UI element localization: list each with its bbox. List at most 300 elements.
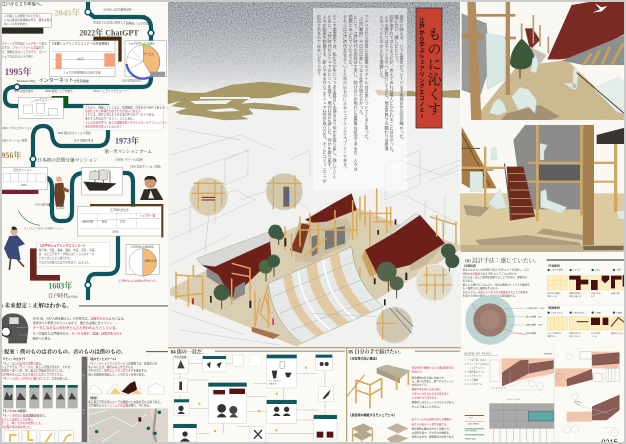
plan 1 <box>490 352 554 402</box>
maroon bar <box>2 190 38 194</box>
panel: perspective 2 <box>460 120 626 252</box>
intro text columns <box>317 14 404 184</box>
ground <box>170 205 460 347</box>
big post <box>583 125 594 252</box>
intro text columns: 四年後すれてきたようだが、考えてみれば隣人とかかわることはなかった。 <box>390 15 394 154</box>
text: site: 江戸時代からモノとシェアの記憶が残り、今に至る。 <box>88 404 152 408</box>
pale figures and plants <box>470 143 626 220</box>
box: Edo graph: 100年 <box>112 229 119 233</box>
text: project outline: 「モノ」がシェアできるサービスの建物では、家族のもの <box>88 361 158 365</box>
future text: 世界すべて学習されていくなかで、僕たちは信じきっていく…… <box>33 320 118 325</box>
text: Edo sharing economy: それらがどんどん駆られた。 <box>39 256 73 260</box>
vertical gray band: コト <box>81 408 85 414</box>
panel: timeline history <box>5 0 154 300</box>
panel: 1956 to 1603 section <box>0 148 163 299</box>
text block 1995: 高度化された情報化が起きた方が良いと考える。 <box>85 109 143 113</box>
plan legend list: 6. シェアスペース <box>465 381 482 385</box>
pie chart box <box>125 41 167 79</box>
plan legend list: 5. シェア菜園 <box>465 377 478 381</box>
plan legends: LAND SHARE <box>467 423 480 426</box>
text red 05b: 既存建物に重ね合わせて設置する。 <box>412 426 451 430</box>
sky <box>460 120 624 194</box>
station labels 1973 <box>2 126 94 143</box>
box: Edo pie chart <box>118 244 159 282</box>
floor edge <box>577 73 626 115</box>
text: project outline: を人々に広げ、場のみならず公共にも、 <box>88 365 136 369</box>
title plate <box>416 8 442 128</box>
far structure <box>522 15 548 67</box>
label notes <box>115 158 161 168</box>
node: central big <box>208 383 247 423</box>
left roof structure <box>462 127 497 188</box>
box: Edo graph: 長屋 <box>102 219 107 223</box>
ground shadows <box>463 205 583 248</box>
right building <box>362 213 445 277</box>
text red 05a: 利用する。 <box>412 370 424 374</box>
node: left small <box>174 378 189 415</box>
diagram: shopping flow: シェアエコノミー <box>34 98 56 102</box>
method grid 1: ④囲う <box>616 268 622 272</box>
vertical gray band <box>81 357 87 443</box>
subhead furniture: 【可変性の高い構法】 <box>349 355 378 360</box>
box: Edo graph: 共同 <box>120 219 126 223</box>
text: site: 東京都江戸区の深川エリアは隅田川と水路の交わる場である。 <box>88 400 163 404</box>
plan legend list <box>465 358 489 385</box>
text: site <box>88 396 163 408</box>
callout leaders <box>205 203 377 317</box>
text red 05a: 柱部分家で建築するとき構造的体を用 <box>412 365 454 369</box>
stairs <box>504 163 535 221</box>
plan 2 gray: シェアリビング <box>507 397 521 401</box>
node: japan <box>318 387 333 402</box>
divider <box>545 305 626 442</box>
timeline labels top: 生活は AIに完全に移行している。 <box>93 20 134 24</box>
timeline stations <box>14 9 154 288</box>
text red 05b: の場所を保つ、それぞれの機能を。 <box>412 430 451 434</box>
pie chart box: サービス <box>143 52 154 56</box>
station labels 1973: 1985 都心のマンション増加 <box>57 131 91 135</box>
node: share 1: シェアのモノ <box>269 379 281 383</box>
text design: 更に人と関わることにより、住民の関係がシェアする範囲を <box>463 282 530 286</box>
intro text columns: 人々が知恵や創意する、新人であるからこそシェア社会が成り立ち。そこにコミュニティが <box>322 15 328 184</box>
node: share 1 <box>267 355 297 388</box>
text: project outline: 【案のモノとスケール】 <box>88 357 118 361</box>
right timber frame <box>360 215 457 283</box>
node: small 1 <box>233 355 261 366</box>
heading 02 proposal: 02 提案：僕のものは君のもの。君のものは僕のもの。 <box>0 347 126 355</box>
node: share 1: 交換する <box>269 382 277 386</box>
station note <box>18 202 64 230</box>
text: thing sharing: 全体の一部一つ分、住、着などが組み合わせている。 <box>1 369 65 373</box>
method grid 2: 【断面操作】 <box>547 305 562 309</box>
text red 05a: 主に手で運ぶことがある。 <box>412 404 441 408</box>
site map <box>88 408 168 443</box>
panel: bottom center <box>168 347 461 442</box>
intro text columns: 隣に会い、隣しだという。 <box>394 14 400 64</box>
roof <box>547 2 626 59</box>
method grid 2: 空間の高さを <box>569 331 581 335</box>
text design <box>463 264 530 298</box>
main title: ものに沁くす <box>426 27 442 117</box>
station labels 1995: 2015 民泊の導入 <box>122 79 142 83</box>
text block sharing: ますが、プラットフォーム企業の力 <box>2 46 44 50</box>
text: case study: したものを集めた。 <box>24 413 48 417</box>
intro text columns: となっていたのかと心を覚醒した。 <box>380 15 384 81</box>
year 1995: 1995年 <box>5 66 32 77</box>
legend dots <box>198 367 307 432</box>
chart box: sharing economy bars: 1兆円 <box>77 57 84 61</box>
icon: AI head <box>1 313 28 343</box>
tree <box>510 38 534 78</box>
detail circle 2 <box>266 173 303 210</box>
method grid 2: つくる <box>591 334 597 338</box>
method grid 2: 設置する <box>547 334 555 338</box>
chart box: sharing economy bars <box>49 40 115 77</box>
plan title: SHOW OF PLAN <box>464 351 491 355</box>
future text: 2045 年、AIが人間を超えた。AIが導けば、正解がわかるようになる。 <box>33 315 126 320</box>
intro text columns: 「江戸幕府」今日の日本につなぐ社会が現れるかった。 <box>359 15 364 118</box>
people <box>192 219 407 325</box>
text: project outline: それぞれに、場所としてモノのカタチを提示する。 <box>88 369 149 373</box>
heading: from Edo: 江戸から２０年後へ。 <box>1 0 45 7</box>
method grid 2: ④屋根 <box>616 310 622 314</box>
plan 4 <box>566 352 619 382</box>
text red 05a: 屋根や木の使いのある所に <box>412 387 442 391</box>
plan legends: SLIT <box>469 418 474 420</box>
box: Edo graph: 居住の形 <box>83 219 94 223</box>
box: Edo pie chart: 武家の土地 <box>145 259 157 263</box>
stakeholder diagram <box>173 355 337 442</box>
method grid 1: 周辺に繋げる <box>569 294 581 298</box>
panel: perspective 1 <box>460 0 626 125</box>
intro text columns: 問題にあふれていたようだ。 <box>348 14 354 68</box>
text red 05a: る。屋台の作業に、幾つかのフレーム <box>412 379 454 383</box>
plan 2 gray <box>489 397 554 442</box>
brown corner <box>93 37 122 62</box>
middle timber frame <box>285 188 393 257</box>
method grid 1 <box>547 264 626 298</box>
method grid 1: 場をつくる <box>547 294 557 298</box>
circle labels: 界隈の範囲 180m <box>526 323 543 327</box>
method grid 1: 【平面操作】 <box>547 264 562 268</box>
chart box: sharing economy bars: シェアの市場規模と自分の実感 <box>63 70 101 74</box>
left timber frame <box>176 263 268 328</box>
text: thing sharing: 「モノ」は人の気持ち実際である。 <box>1 361 44 365</box>
Edo period label: 江戸時代徳川幕府 <box>48 292 78 299</box>
front frame of canopy <box>255 238 325 327</box>
figure: commodore portrait <box>140 176 163 200</box>
method grid 1: 出す <box>591 294 595 298</box>
text block sharing <box>2 41 47 58</box>
ground <box>460 193 626 252</box>
year 1973: 1973年 <box>115 136 139 146</box>
intro text columns: として、江戸時代の庶民は工夫し、助け合いが現代とは異質な状況であるが、人々は <box>354 15 358 171</box>
station note: 1910 近代的マンション <box>35 202 63 206</box>
year 1603: 1603年 <box>48 281 72 291</box>
text design: 【空間構成】 <box>463 264 478 268</box>
text block 1995: 来の目的を見失っていないか？ <box>85 125 122 129</box>
timeline labels top <box>93 8 149 25</box>
text red 05a: で保つ人々を入れたまま材を使う <box>412 391 449 395</box>
method grid 2: 屋根をかける <box>611 331 623 335</box>
caption: イメージパース <box>584 245 603 249</box>
plan 1: 共同住宅 <box>544 352 552 356</box>
timeline labels top: 2030年 シェアの国 <box>126 21 149 25</box>
plan legend list: 2. チャットルームの入口 <box>465 362 489 366</box>
ground <box>481 60 624 120</box>
text design: 形である。 <box>463 279 475 283</box>
future text: 時代へと至る。 <box>33 335 53 340</box>
plan 1: シェアスペース <box>492 386 505 390</box>
text block 1995: それらは、現在に至るまでの企業が中心のサービスである。 <box>85 113 157 117</box>
method grid 2 <box>547 305 626 338</box>
internet heading: Windows 95に、インターネットが普及開始 <box>17 77 89 84</box>
shadows <box>501 105 560 120</box>
method grid 2: シェアの場所を <box>547 331 561 335</box>
text: project outline: 個人の関係を想起した、人々がコトを持ち寄る。 <box>88 372 147 376</box>
node: bottom <box>173 424 266 442</box>
middle building <box>290 193 357 263</box>
tan divider lines <box>168 348 461 442</box>
station labels 1973: 1974 団地の生活 <box>73 138 94 142</box>
figure: edo merchant <box>54 176 69 209</box>
box: Edo graph: シェアの一面 <box>139 214 156 218</box>
private condominium heading: 日本初の民間分譲マンション <box>37 156 98 163</box>
station labels 1995: 2010 シェアリングエコノミー <box>93 89 130 93</box>
text: Edo sharing economy <box>37 243 110 267</box>
left building <box>197 232 272 301</box>
text red 05a: の組み立てる。 <box>412 383 429 387</box>
method grid 2: 変化させる <box>569 334 579 338</box>
text: Edo sharing economy: 井戸端、寺院、組織、番品、丼品、道具、宝品、 <box>39 248 97 252</box>
text red 05b: 各フレーム内の部材に新たな建築の <box>412 417 452 421</box>
box: mansion plan: 近世マンション <box>13 168 32 172</box>
text: case study: 「モノ」のの思い出を記憶し、 <box>1 413 39 417</box>
concentric circle diagram <box>465 295 527 345</box>
panel: left column <box>2 2 168 442</box>
note box 2045 <box>2 13 52 27</box>
node: share 2 <box>267 400 297 423</box>
share cards <box>3 385 78 408</box>
station labels 1995: 2005 家電シェアの動き <box>45 89 73 93</box>
text red 05a: いた材だけで活かせる。 <box>412 396 439 400</box>
left wall <box>462 13 490 97</box>
text block sharing: で、国際社会はシェアの下で、でいく <box>2 50 47 54</box>
background line sketch <box>170 128 460 345</box>
pale figures <box>489 56 578 115</box>
timeline labels top: 2039年 火星の都市計画 <box>103 8 132 12</box>
pale sign <box>593 77 626 115</box>
intro text columns: それらは江戸時代を生きていくための以ものによるシェアリングエコノミーである。 <box>343 14 348 171</box>
ship picture <box>82 167 123 195</box>
text: thing sharing <box>1 357 71 381</box>
text red 05b <box>412 417 454 438</box>
text design: 広く展開されに展開を生み出す。 <box>463 286 500 290</box>
text: case study: の記憶がある場を作った。 <box>1 425 33 429</box>
trees <box>214 225 459 309</box>
text red 05b: 見積りは住宅、建築費用の形式である <box>412 434 454 438</box>
text red 05a: 建築的にはモジュールの大きさがある。 <box>412 400 456 404</box>
text red 05a: 既存建物の柱や梁に付加され <box>412 375 444 379</box>
bird <box>593 3 607 13</box>
frame timbers <box>462 125 617 221</box>
text design: それらでなく 共有により生み出す関係を作ることで場所を <box>463 290 528 294</box>
gold clouds <box>168 82 462 120</box>
circle labels: 隣人の範囲 18m <box>526 314 542 318</box>
green corner <box>52 96 68 107</box>
heading 04: 04 街の一員だ。 <box>171 348 207 355</box>
text: case study <box>1 409 48 429</box>
maroon corner <box>30 248 60 281</box>
intro text columns: 人々の関わりはネットの中へと移行してきた。現実世界での関わりは希薄 <box>384 15 390 151</box>
text: thing sharing: 「モノ」と共に人が互いに暮らすことで、工夫を楽しむ。 <box>1 377 70 381</box>
box: Edo pie chart: 江戸時代の人口は全体の50%だった。 <box>118 278 158 282</box>
plan legend list: シェアキッチン <box>469 365 484 369</box>
station labels 1973: 1990 バブルとマンション <box>2 126 33 130</box>
method grid 1: ①格子を配置 <box>551 268 563 272</box>
pie chart box: シェアのサービス割合 <box>128 41 155 45</box>
detail circle 1 <box>190 178 228 216</box>
under roof wall <box>562 34 626 65</box>
method grid 2: 生活の場を <box>591 331 601 335</box>
vertical gray band: モノ <box>81 374 85 380</box>
canopy <box>268 247 383 343</box>
text design: 時代の共有範囲である1000 エリアごとに分けた。 <box>463 271 519 275</box>
text: case study: モノと「場」そのものを形にした。 <box>1 421 44 425</box>
text block 1995: そんな状況の中で、新たな課題を招くのだろうかシェアコミュニティーが本 <box>85 121 175 125</box>
intro text columns: そこで本提案では、私たちが失いつつある数日に出現るなり何かを取り戻し、残していく <box>332 14 338 179</box>
heading 06: 06 設計手法：感じていたい。 <box>465 256 540 264</box>
future text: データにならない何かがどんどん失われようとしている。 <box>33 325 119 330</box>
intro text columns: 形成されるのではないだろうか？ <box>317 14 322 76</box>
intro text columns: 夜空に映える、いつも電気がついている不夜城お世の室が輝かった。 <box>400 14 404 142</box>
text: thing sharing: シェアできる「モノ」から、新しい空間が生まれ、それを <box>1 365 71 369</box>
node: storage <box>314 415 337 440</box>
plan legend list: 4. シェアキッチン <box>465 373 482 377</box>
node: people <box>316 355 332 371</box>
axonometric drawing <box>170 173 460 347</box>
text design: それらを、新しい路地を配置することで生まれ、建築的な <box>463 275 528 279</box>
plan legends: SHARE WALL <box>465 437 476 440</box>
text block 1995: 進化する生活はサービスへ、さらに変化。 <box>85 116 135 120</box>
method grid 1: 共有を生み <box>591 291 601 295</box>
note box 2045: 人の暮らしは便利でAIと共生し、 <box>4 14 44 18</box>
station labels 1995: 1990 高度の進行 <box>13 89 34 93</box>
node: butterflies <box>203 356 226 372</box>
method grid 1: 街路に開く <box>611 291 621 295</box>
method grid 1: ②ずらす <box>573 268 581 272</box>
silhouette diagram <box>90 381 164 394</box>
future text: モノが溢れた江戸時代から、モノから変化・認識・記憶が失われる <box>33 330 122 335</box>
right roof <box>597 127 626 144</box>
timeline route line <box>5 0 151 300</box>
year 2022: 2022年 ChatGPT <box>79 27 139 37</box>
noise texture <box>168 2 462 97</box>
glass panel <box>486 33 505 89</box>
text: thing sharing: 【「モノ」のカタチ】 <box>1 357 27 361</box>
text block 1995: これから、飛躍していくなる。情報機器・住宅を見る時代であるが、以前 <box>85 105 173 109</box>
panel: design method <box>461 245 626 444</box>
plan legend list: 3. 工房作業スペース <box>465 369 484 373</box>
note box 2045: 人々は多様な価値観を持ち、都市は再び <box>4 18 52 22</box>
plan 5 <box>563 395 619 436</box>
mansion boom heading: 第一次マンションブーム <box>105 148 152 155</box>
text block 1995 <box>83 105 175 130</box>
station labels 1973: 1980 マンション投資 <box>2 139 27 143</box>
box: mansion plan: 1956 <box>21 183 27 187</box>
box: Edo graph <box>77 207 161 236</box>
intro text columns: ために、江戸時代からシェアのヒントを探す。現代社会に適した、何かを取り戻す。 <box>328 14 332 171</box>
panel: center hero <box>168 2 462 347</box>
plan legend list: 1. 「つなぎ場」の入口 <box>465 358 486 362</box>
furniture stacks <box>352 423 408 442</box>
dark bar <box>2 28 43 34</box>
panel: future scenario and proposal <box>0 302 168 443</box>
furniture drawing table <box>347 365 410 408</box>
method grid 2: ②床を重ねる <box>573 310 585 314</box>
method grid 1: ③抜く <box>595 268 601 272</box>
gray building <box>513 125 583 209</box>
large post and beams <box>462 2 516 125</box>
intro text columns: アメリカから安易とお産業のベクトルは日本についてくると言った。 <box>364 15 370 142</box>
method grid 2: ①柱を立てる <box>551 310 563 314</box>
method grid 1: 周囲の路地を <box>569 291 581 295</box>
plan legends <box>465 415 484 440</box>
small maps <box>4 431 73 443</box>
text: case study: そうした状況と人々の場へ <box>1 417 34 421</box>
label notes: 1960 木造マンション増加 <box>130 164 161 168</box>
circle labels: 人の最小単位 1.8m <box>526 306 545 310</box>
chart box: sharing economy bars: 【主要シェアリングエコノミーの市場規模】 <box>51 40 110 45</box>
sky <box>460 0 626 125</box>
text red 05a <box>412 365 456 408</box>
text: site: 【敷地】 <box>88 396 99 400</box>
text: Edo sharing economy: つながりが彼らの江戸の生活で、広まった。 <box>39 260 92 264</box>
node: temple <box>173 355 188 373</box>
box: mansion plan <box>2 167 47 189</box>
box: Edo pie chart: 江戸時代の土地の割合 <box>131 245 155 249</box>
brown corner <box>90 204 163 237</box>
text red 05b: お互いのあるべく発生を続ける。 <box>412 422 449 426</box>
text: Edo sharing economy: 【江戸のシェアリングエコノミー】 <box>39 243 86 248</box>
text: case study: 【モノとコトの研究】 <box>1 409 28 413</box>
panel: 2045 to 1973 section <box>1 0 175 146</box>
method grid 1: 格子状に配置し <box>547 291 561 295</box>
text: project outline <box>88 357 158 376</box>
text design: 生成する住民の間がシェアとなる空間設備する。 <box>463 294 517 298</box>
text block sharing: シェアが広がるようで狭い <box>2 54 34 58</box>
method grid 2: ③部屋 <box>595 310 601 314</box>
subhead 2: 【居住域の機能するモシェアエコ】 <box>349 412 396 417</box>
subtitle: 江戸から学ぶシェアリングエコノミー <box>418 17 425 119</box>
label notes: 1958年 アパート入居者 <box>115 158 143 162</box>
text design: 場合における人の居場所である 1000 エリアを設定し、江戸 <box>463 268 530 272</box>
box: Edo graph: 江戸時代の生活 <box>110 208 129 212</box>
circle labels: 町内の範囲 <box>526 331 536 335</box>
panel: plans <box>464 350 619 444</box>
text: thing sharing: 江戸時代の人はこれまで様々に工夫しつづけてきた。 <box>1 373 65 377</box>
detail circle 4 <box>376 307 413 343</box>
station labels 1995 <box>13 79 142 93</box>
year 2045: 2045年 <box>54 7 81 18</box>
diagram: shopping flow <box>18 98 63 118</box>
deck <box>252 327 280 339</box>
caption: イメージパース <box>589 119 608 123</box>
circle labels <box>526 306 545 335</box>
node: temple: 町内会組織 <box>175 355 187 359</box>
strip of ground <box>461 245 626 252</box>
note box 2045: 新しい共有を始めた。 <box>4 22 31 26</box>
